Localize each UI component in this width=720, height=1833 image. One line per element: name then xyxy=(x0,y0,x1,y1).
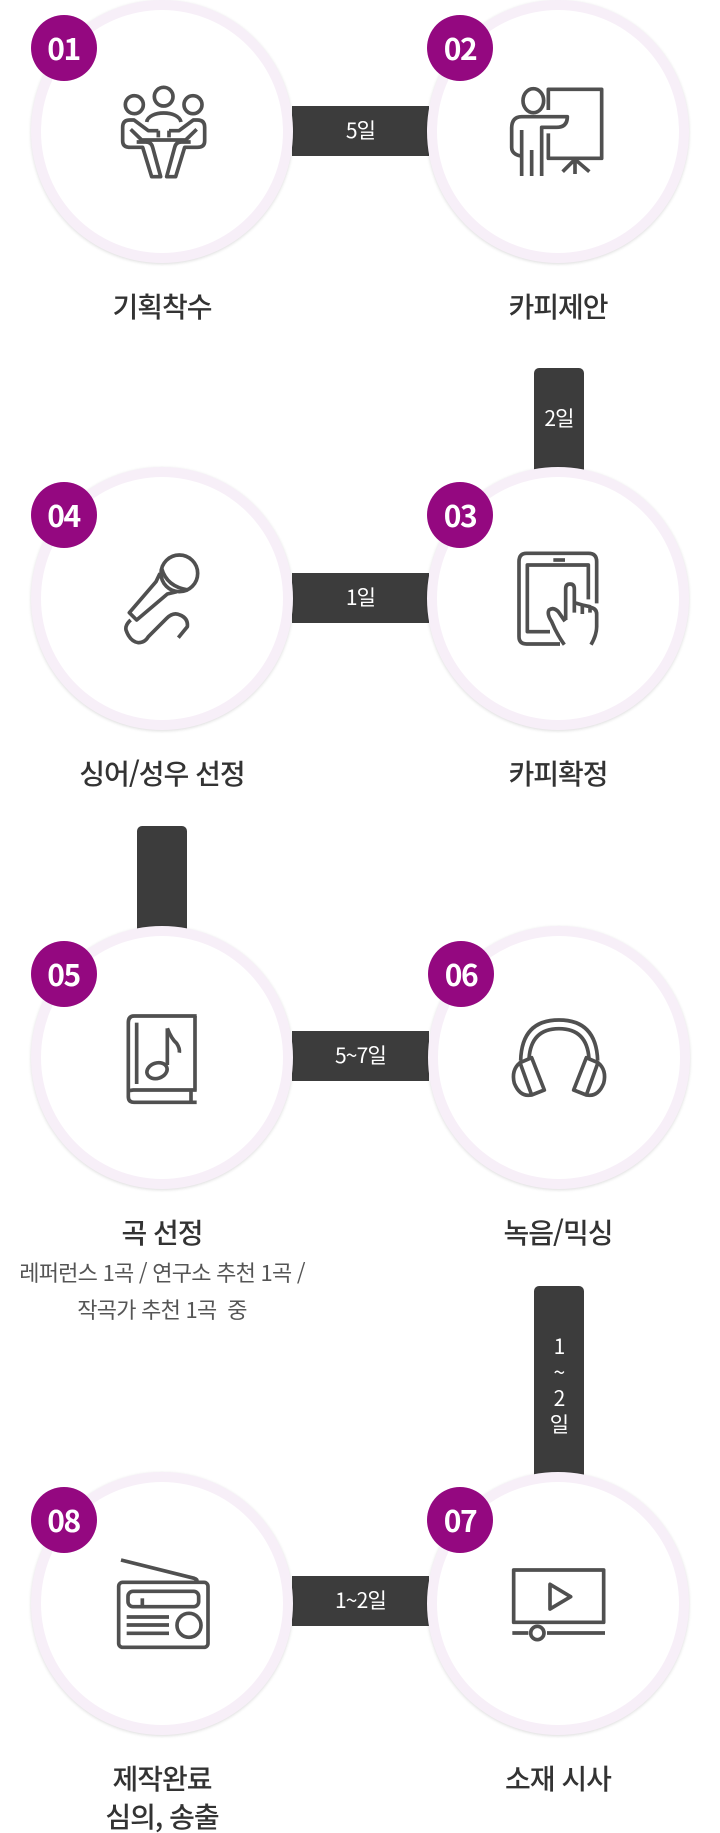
connector: 5일: 5일 xyxy=(346,115,375,145)
connector: 1~2일: 1~2일 xyxy=(335,1585,386,1615)
badge 03 xyxy=(427,482,493,548)
connector: 1~2일 vertical: 1 xyxy=(554,1331,564,1361)
connector: blank vertical xyxy=(137,826,187,930)
connector: 1~2일 xyxy=(292,1576,429,1626)
step 02 label: 카피제안 xyxy=(508,286,608,326)
badge 06: 06 xyxy=(445,951,477,995)
icon: radio xyxy=(116,1558,210,1650)
step 08 circle xyxy=(30,1472,292,1735)
icon: video player xyxy=(512,1568,606,1642)
connector: 1~2일 vertical: ~ xyxy=(554,1357,564,1387)
badge 01: 01 xyxy=(47,25,80,69)
connector: 5~7일 xyxy=(292,1031,429,1081)
connector: 5일 xyxy=(292,106,429,156)
icon: song book xyxy=(126,1014,197,1104)
badge 07: 07 xyxy=(444,1497,476,1541)
connector: 1~2일 vertical xyxy=(534,1286,584,1476)
icon: headphones xyxy=(512,1018,606,1098)
step 07 label: 소재 시사 xyxy=(505,1758,611,1798)
step 06 circle xyxy=(428,926,690,1189)
connector: 1일: 1일 xyxy=(346,582,375,612)
icon: meeting xyxy=(120,86,206,178)
step 01 label: 기획착수 xyxy=(112,286,212,326)
icon: tablet touch xyxy=(517,552,598,646)
step 05 description: 작곡가 추천 1곡 중 xyxy=(77,1293,247,1325)
badge 07 xyxy=(427,1487,493,1553)
step 08 label xyxy=(105,1758,219,1833)
connector: 2일: 2일 xyxy=(544,403,574,433)
badge 02: 02 xyxy=(444,25,476,69)
step 05 label: 곡 선정 xyxy=(121,1212,203,1252)
step 05 description xyxy=(19,1256,306,1325)
badge 01 xyxy=(30,15,96,81)
connector: 1~2일 vertical: 2 xyxy=(554,1383,564,1413)
step 03 label: 카피확정 xyxy=(508,753,608,793)
step 08 label: 제작완료 xyxy=(112,1758,212,1798)
step 05 circle xyxy=(30,926,292,1189)
step 04 circle xyxy=(30,467,292,730)
step 04 label: 싱어/성우 선정 xyxy=(79,753,245,793)
icon: presentation xyxy=(510,86,604,176)
step 02 circle xyxy=(427,0,689,263)
step 05 description: 레퍼런스 1곡 / 연구소 추천 1곡 / xyxy=(19,1256,305,1288)
badge 05: 05 xyxy=(47,951,80,995)
badge 02 xyxy=(427,15,493,81)
badge 04: 04 xyxy=(47,492,80,536)
badge 06 xyxy=(428,941,494,1007)
connector: 1일 xyxy=(292,573,429,623)
badge 08 xyxy=(30,1487,96,1553)
step 07 circle xyxy=(427,1472,689,1735)
badge 08: 08 xyxy=(47,1497,80,1541)
badge 04 xyxy=(30,482,96,548)
connector: 1~2일 vertical: 일 xyxy=(550,1409,568,1439)
badge 03: 03 xyxy=(444,492,476,536)
step 06 label: 녹음/믹싱 xyxy=(503,1212,613,1252)
step 03 circle xyxy=(427,467,689,730)
badge 05 xyxy=(30,941,96,1007)
connector: 2일 xyxy=(534,368,584,472)
step 01 circle xyxy=(30,0,292,263)
connector: 5~7일: 5~7일 xyxy=(335,1040,386,1070)
icon: microphone xyxy=(124,553,200,644)
